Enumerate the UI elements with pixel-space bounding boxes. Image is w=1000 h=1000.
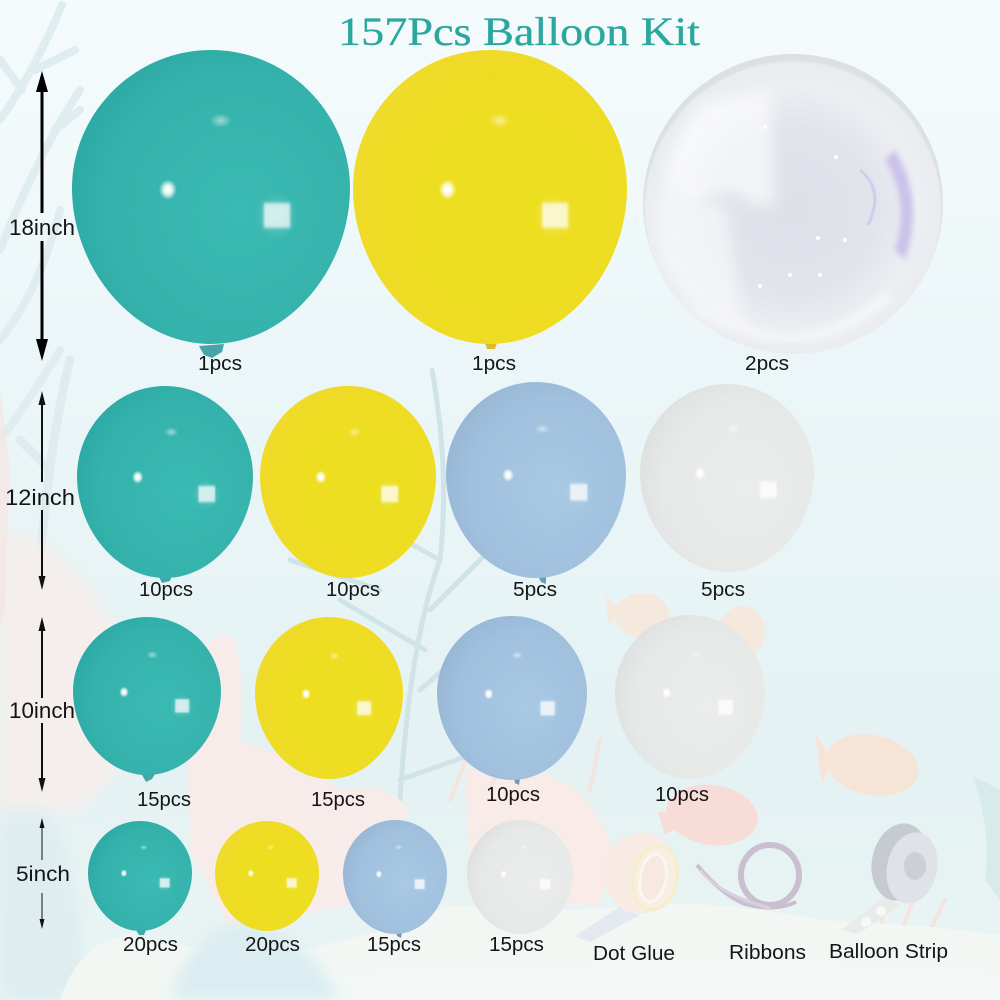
counts 18in: 2pcs: [745, 352, 789, 375]
balloon: clear bubble: [643, 54, 943, 354]
balloon: white 5in: [467, 820, 573, 934]
accessory: ribbons: [697, 845, 799, 908]
accessory labels: Balloon Strip: [829, 940, 948, 963]
size arrow 12inch: 12inch: [5, 485, 75, 510]
row: 18inch: [9, 50, 943, 375]
balloon: teal 10in: [73, 617, 221, 782]
size arrow 18inch: 18inch: [9, 215, 75, 240]
balloon: white 10in: [615, 615, 765, 779]
size arrow 12inch: [5, 391, 75, 590]
counts 12in: [139, 578, 745, 601]
seaweed top left: [0, 5, 80, 440]
accessory: dot glue roll: [575, 827, 682, 942]
seaweed lower left: [20, 360, 70, 560]
row: 5inch: [16, 818, 573, 956]
counts 12in: 10pcs: [139, 578, 193, 601]
balloon: teal 5in: [88, 821, 192, 935]
title: 157Pcs Balloon Kit: [338, 9, 700, 54]
balloon: yellow 12in: [260, 386, 436, 578]
counts 18in: [198, 352, 789, 375]
row: 12inch: [5, 382, 814, 601]
counts 18in: 1pcs: [198, 352, 242, 375]
counts 12in: 5pcs: [701, 578, 745, 601]
centre stems: [290, 370, 500, 800]
accessory labels: Dot Glue: [593, 942, 675, 965]
blue rock left: [0, 810, 85, 1000]
size arrow 18inch: [9, 71, 75, 361]
balloon: yellow 10in: [255, 617, 403, 779]
counts 18in: 1pcs: [472, 352, 516, 375]
sea floor: [60, 904, 1000, 1000]
counts 10in: [137, 783, 709, 811]
balloon: yellow 5in: [215, 821, 319, 931]
fish right: [815, 726, 924, 804]
balloon: blue 12in: [446, 382, 626, 584]
fish pink: [658, 779, 762, 851]
coral pink middle: [185, 636, 408, 930]
balloon: blue 10in: [437, 616, 587, 785]
counts 10in: 15pcs: [137, 788, 191, 811]
row: 10inch: [9, 615, 765, 811]
counts 5in: 20pcs: [245, 933, 300, 956]
accessory: balloon strip: [841, 818, 944, 934]
sea floor front: [200, 959, 1000, 1000]
balloon: yellow 18in: [353, 50, 627, 349]
size arrow 10inch: 10inch: [9, 698, 75, 723]
size arrow 5inch: 5inch: [16, 862, 70, 886]
counts 12in: 10pcs: [326, 578, 380, 601]
balloon: teal 12in: [77, 386, 253, 583]
blue rock centre: [170, 920, 340, 1000]
seaweed right: [972, 775, 1000, 900]
size arrow 10inch: [9, 617, 75, 792]
pale coral left: [0, 530, 130, 830]
coral pink right of centre: [465, 764, 615, 905]
fish upper pair: [606, 593, 765, 658]
counts 12in: 5pcs: [513, 578, 557, 601]
counts 5in: 20pcs: [123, 933, 178, 956]
pink coral edge left: [0, 390, 10, 630]
counts 5in: [123, 933, 544, 956]
accessory labels: [593, 940, 948, 965]
balloon: white 12in: [640, 384, 814, 572]
accessory labels: Ribbons: [729, 941, 806, 964]
size arrow 5inch: [16, 818, 70, 929]
pale red branch coral: [450, 740, 945, 940]
balloon: teal 18in: [72, 50, 350, 358]
balloon: blue 5in: [343, 820, 447, 938]
counts 5in: 15pcs: [367, 933, 421, 956]
counts 10in: 15pcs: [311, 788, 365, 811]
counts 10in: 10pcs: [486, 783, 540, 806]
counts 5in: 15pcs: [489, 933, 544, 956]
counts 10in: 10pcs: [655, 783, 709, 806]
